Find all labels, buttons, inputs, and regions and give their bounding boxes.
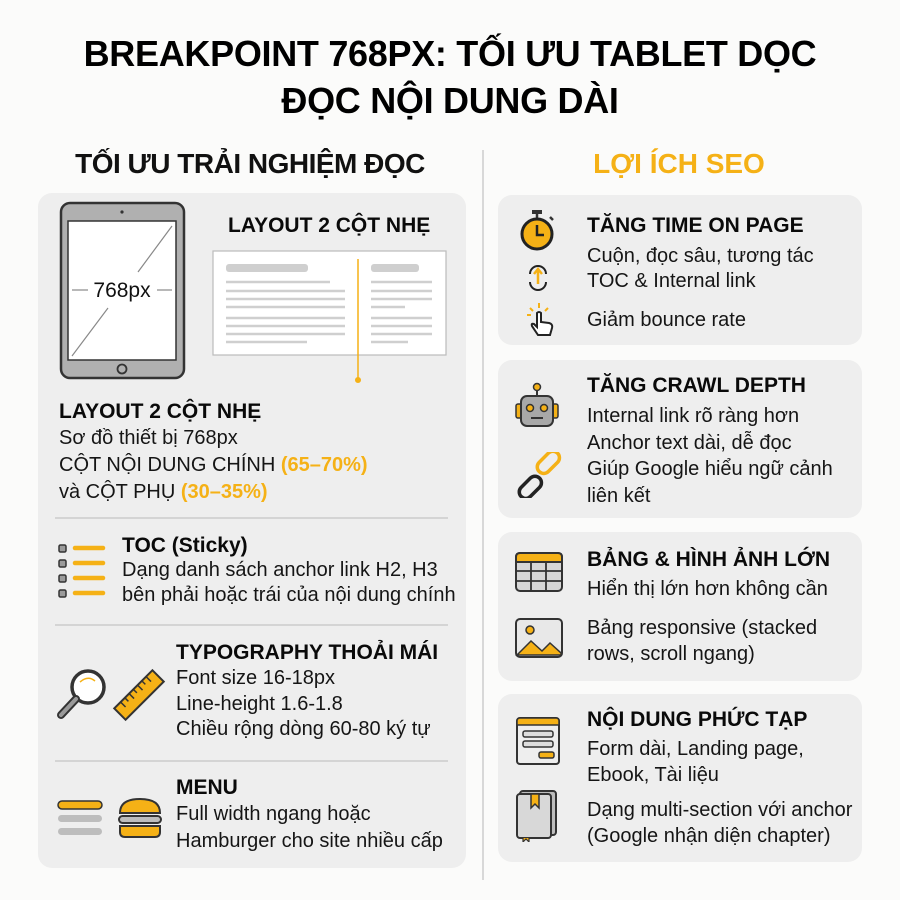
panel: tables and images — [498, 532, 862, 681]
text block: crawl depth: liên kết — [587, 484, 650, 506]
text block: crawl depth: Giúp Google hiểu ngữ cảnh — [587, 458, 833, 480]
icon: ruler — [112, 668, 166, 722]
panel: time on page — [498, 195, 862, 345]
text block: toc: Dạng danh sách anchor link H2, H3 — [122, 559, 438, 581]
chart: two column wireframe — [212, 250, 447, 383]
text block: layout: và CỘT PHỤ (30–35%) — [59, 481, 268, 503]
heading: left column: TỐI ƯU TRẢI NGHIỆM ĐỌC — [75, 148, 425, 179]
text block: layout: LAYOUT 2 CỘT NHẸ — [59, 400, 261, 423]
panel: complex content — [498, 694, 862, 862]
text block: tables and images: rows, scroll ngang) — [587, 643, 755, 665]
title: ĐỌC NỘI DUNG DÀI — [281, 80, 619, 121]
text block: typography: TYPOGRAPHY THOẢI MÁI — [176, 641, 438, 664]
icon: scroll — [529, 265, 547, 291]
heading: layout diagram: LAYOUT 2 CỘT NHẸ — [228, 214, 430, 237]
title: BREAKPOINT 768PX: TỐI ƯU TABLET DỌC — [84, 33, 816, 74]
panel: crawl depth — [498, 360, 862, 518]
panel: left reading experience — [38, 193, 466, 868]
icon: hamburger — [118, 798, 162, 838]
icon: tablet — [60, 202, 186, 380]
text block: complex content: Form dài, Landing page, — [587, 738, 804, 760]
icon: pointer click — [527, 303, 554, 336]
text block: complex content — [587, 706, 852, 846]
icon: book — [516, 790, 557, 842]
text block: crawl depth: TĂNG CRAWL DEPTH — [587, 374, 806, 397]
text block: time on page: TĂNG TIME ON PAGE — [587, 214, 804, 237]
text block: time on page: TOC & Internal link — [587, 270, 756, 292]
text block: tables and images: Hiển thị lớn hơn không cần — [587, 578, 828, 600]
heading: right column: LỢI ÍCH SEO — [593, 148, 765, 179]
text block: complex content: (Google nhận diện chapter) — [587, 824, 830, 846]
text block: time on page: Giảm bounce rate — [587, 309, 746, 331]
icon: image — [515, 618, 563, 658]
text block: layout: Sơ đồ thiết bị 768px — [59, 427, 238, 449]
text block: crawl depth: Internal link rõ ràng hơn — [587, 405, 799, 427]
text block: tables and images: Bảng responsive (stacked — [587, 617, 817, 639]
text block: crawl depth: Anchor text dài, dễ đọc — [587, 432, 792, 454]
icon: magnifier — [57, 669, 106, 719]
icon: menu bars — [57, 800, 103, 835]
text block: crawl depth — [587, 373, 833, 506]
text block: typography: Chiều rộng dòng 60-80 ký tự — [176, 718, 431, 740]
icon: link — [518, 452, 562, 498]
icon: toc list — [58, 544, 106, 598]
title — [84, 33, 816, 121]
text block: complex content: NỘI DUNG PHỨC TẠP — [587, 708, 807, 731]
text block: toc: bên phải hoặc trái của nội dung chính — [122, 584, 456, 606]
text block: typography — [176, 640, 438, 740]
text block: typography: Font size 16-18px — [176, 667, 335, 689]
icon: robot — [515, 382, 559, 427]
text block: toc — [122, 534, 456, 606]
icon: stopwatch — [520, 210, 554, 250]
text block: layout — [59, 398, 368, 503]
text block: layout: CỘT NỘI DUNG CHÍNH (65–70%) — [59, 454, 368, 476]
text block: typography: Line-height 1.6-1.8 — [176, 692, 343, 714]
text block: time on page — [587, 213, 814, 331]
icon: form window — [516, 717, 560, 765]
icon: table — [515, 552, 563, 592]
text block: tables and images — [587, 546, 830, 665]
text block: menu — [176, 776, 443, 852]
text block: complex content: Ebook, Tài liệu — [587, 764, 719, 786]
text block: tables and images: BẢNG & HÌNH ẢNH LỚN — [587, 548, 830, 571]
text block: menu: Full width ngang hoặc — [176, 803, 371, 825]
icon: tablet: 768px — [93, 279, 151, 302]
text block: toc: TOC (Sticky) — [122, 534, 248, 557]
text block: menu: Hamburger cho site nhiều cấp — [176, 830, 443, 852]
text block: time on page: Cuộn, đọc sâu, tương tác — [587, 245, 814, 267]
text block: complex content: Dạng multi-section với anchor — [587, 799, 852, 821]
text block: menu: MENU — [176, 776, 238, 799]
